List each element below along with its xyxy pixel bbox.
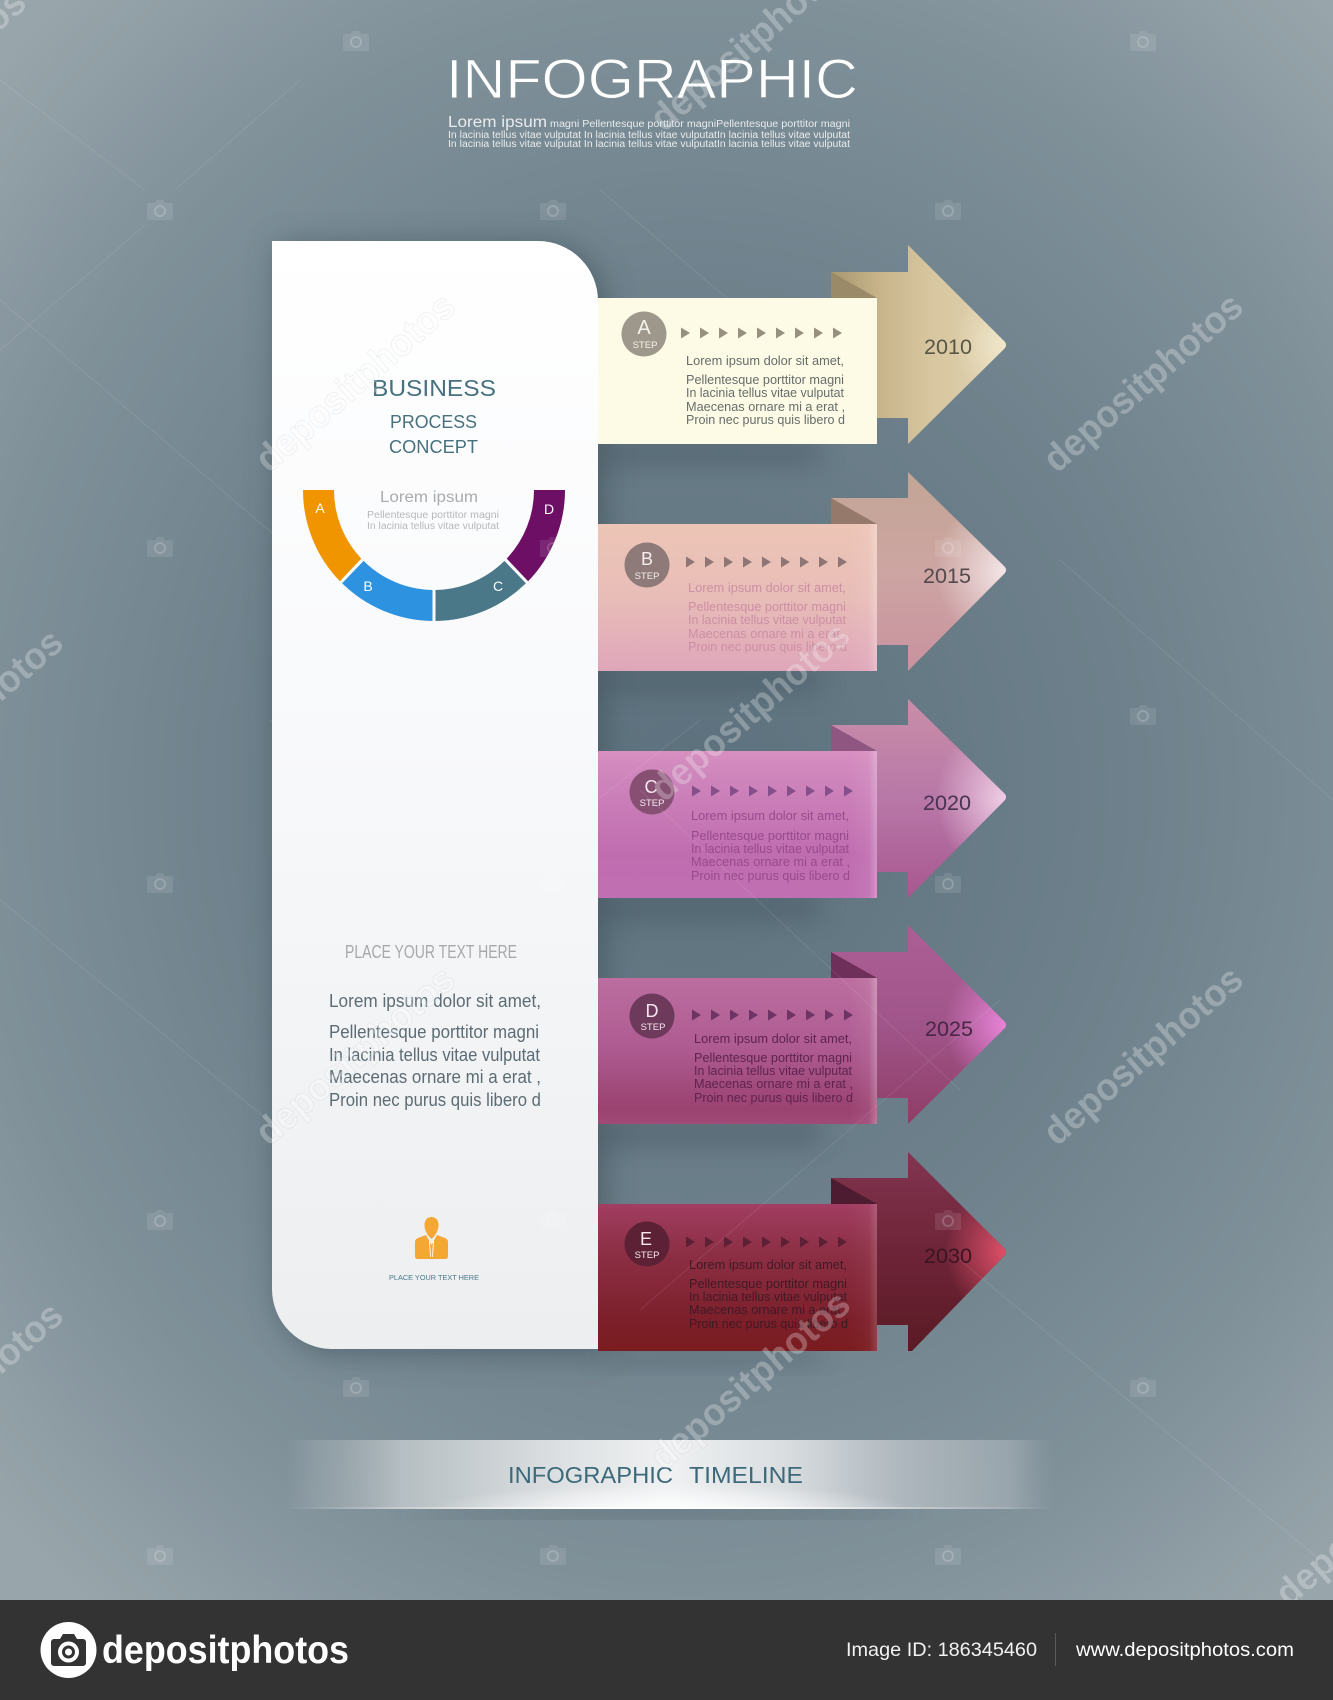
ribbon A (598, 298, 877, 444)
arrow fold A (831, 272, 877, 298)
triangles E (686, 1236, 847, 1248)
text E: Maecenas ornare mi a erat , (689, 1302, 848, 1317)
step badge A: STEP (633, 340, 657, 351)
text B: Pellentesque porttitor magni (688, 599, 846, 614)
step A: 2010 arrow row (598, 245, 1006, 444)
text C: Lorem ipsum dolor sit amet, (691, 808, 849, 823)
ribbon D (598, 978, 877, 1124)
step B: 2015 arrow row (598, 472, 1006, 671)
panel body text: Lorem ipsum dolor sit amet, (329, 991, 541, 1011)
text C: Maecenas ornare mi a erat , (691, 854, 850, 869)
text E: In lacinia tellus vitae vulputat (689, 1289, 847, 1304)
step badge C: STEP (640, 798, 664, 809)
text A (686, 353, 845, 427)
arrow E (831, 1152, 1006, 1351)
website: www.depositphotos.com (1075, 1639, 1294, 1661)
text C: Proin nec purus quis libero d (691, 868, 850, 883)
subtitle text block (448, 114, 850, 150)
ribbon C (598, 751, 877, 898)
chart letters: D (544, 501, 554, 517)
footer bar (0, 1600, 1333, 1700)
chart: semicircle donut (303, 490, 565, 621)
text B: Proin nec purus quis libero d (688, 639, 847, 654)
band label (508, 1462, 803, 1488)
image id: Image ID: 186345460 (846, 1639, 1037, 1661)
text D: Maecenas ornare mi a erat , (694, 1076, 853, 1091)
text B: Maecenas ornare mi a erat , (688, 626, 847, 641)
panel: main white card (272, 241, 598, 1349)
text A: Pellentesque porttitor magni (686, 372, 844, 387)
step badge B: STEP (635, 571, 659, 582)
arrow B (831, 472, 1006, 671)
step badge B: B (641, 549, 653, 569)
text A: Lorem ipsum dolor sit amet, (686, 353, 844, 368)
watermark pattern: depositphotos (247, 958, 464, 1154)
arrow D (831, 925, 1006, 1124)
arrow C (831, 699, 1006, 898)
text E: Pellentesque porttitor magni (689, 1276, 847, 1291)
step badge B (624, 542, 670, 588)
step badge C: C (644, 777, 658, 797)
chart letters: C (493, 578, 503, 594)
logo wordmark: depositphotos (102, 1629, 349, 1672)
ribbon shadows (600, 444, 820, 1361)
ribbon B (598, 524, 877, 671)
text D: Pellentesque porttitor magni (694, 1050, 852, 1065)
text D: Proin nec purus quis libero d (694, 1090, 853, 1105)
step badge E: STEP (635, 1250, 659, 1261)
band label: TIMELINE (689, 1462, 803, 1488)
icon: businessman (415, 1217, 448, 1259)
text E: Lorem ipsum dolor sit amet, (689, 1257, 847, 1272)
panel heading: CONCEPT (389, 437, 478, 457)
step badge E (624, 1222, 670, 1266)
watermark pattern: depositphotos (642, 1283, 859, 1479)
chart centre text (367, 489, 499, 532)
panel body text (329, 991, 541, 1110)
subtitle text block: magni Pellentesque porttitor magniPellentesque porttitor magni (550, 119, 850, 130)
step badge D: D (646, 1001, 658, 1021)
step badge E: E (640, 1229, 652, 1249)
text D: In lacinia tellus vitae vulputat (694, 1063, 852, 1078)
text D (694, 1031, 853, 1105)
step badge D: STEP (641, 1022, 665, 1033)
panel shadow (278, 245, 604, 1353)
triangles C (692, 786, 853, 796)
separator (1055, 1633, 1056, 1666)
watermark pattern: depositphotos (642, 614, 859, 810)
segment C (436, 561, 526, 621)
arrow A (831, 245, 1006, 444)
arrow fold D (831, 952, 877, 978)
year 2025: 2025 (925, 1018, 973, 1041)
ribbon E (598, 1204, 877, 1351)
title: INFOGRAPHIC (446, 47, 858, 110)
chart letters: A (315, 500, 325, 516)
arrow fold B (831, 498, 877, 524)
text A: In lacinia tellus vitae vulputat (686, 385, 844, 400)
step badge A: A (637, 317, 651, 339)
text B (688, 580, 847, 654)
text C: Pellentesque porttitor magni (691, 828, 849, 843)
segment B (342, 561, 432, 621)
triangles A (681, 328, 842, 338)
chart centre text: Pellentesque porttitor magni (367, 509, 499, 521)
panel body text: Pellentesque porttitor magni (329, 1022, 539, 1042)
text D: Lorem ipsum dolor sit amet, (694, 1031, 852, 1046)
text A: Proin nec purus quis libero d (686, 412, 845, 427)
year 2010: 2010 (924, 336, 972, 359)
step E: 2030 arrow row (598, 1152, 1006, 1351)
text E (689, 1257, 848, 1331)
band shadow (410, 1505, 910, 1519)
watermark pattern: depositphotos (247, 285, 464, 481)
watermark pattern: depositphotos (1035, 285, 1252, 481)
step badge D (630, 994, 674, 1038)
chart letters: B (363, 578, 373, 594)
panel body text: In lacinia tellus vitae vulputat (329, 1045, 540, 1065)
text B: Lorem ipsum dolor sit amet, (688, 580, 846, 595)
panel heading: BUSINESS (372, 375, 496, 401)
triangles B (686, 556, 847, 568)
subtitle text block: In lacinia tellus vitae vulputat In lacinia tellus vitae vulputatIn lacinia tellus vitae vulputat (448, 130, 850, 141)
year 2020: 2020 (923, 792, 971, 815)
triangles D (692, 1010, 853, 1020)
icon caption: PLACE YOUR TEXT HERE (389, 1273, 479, 1282)
text C: In lacinia tellus vitae vulputat (691, 841, 849, 856)
panel sub-heading: PLACE YOUR TEXT HERE (345, 942, 517, 962)
step badge C (630, 770, 674, 814)
chart centre text: Lorem ipsum (380, 489, 478, 506)
watermark pattern: depositphotos (1035, 958, 1252, 1154)
bottom timeline band (285, 1440, 1055, 1509)
subtitle text block: Lorem ipsum (448, 114, 547, 131)
year 2015: 2015 (923, 565, 971, 588)
text A: Maecenas ornare mi a erat , (686, 399, 845, 414)
panel body text: Maecenas ornare mi a erat , (329, 1067, 541, 1087)
chart centre text: In lacinia tellus vitae vulputat (367, 520, 499, 532)
logo icon (40, 1622, 96, 1678)
band label: INFOGRAPHIC (508, 1462, 673, 1488)
text E: Proin nec purus quis libero d (689, 1316, 848, 1331)
subtitle text block: In lacinia tellus vitae vulputat In lacinia tellus vitae vulputatIn lacinia tellus vitae vulputat (448, 139, 850, 150)
arrow fold C (831, 725, 877, 751)
text C (691, 808, 850, 883)
text B: In lacinia tellus vitae vulputat (688, 612, 846, 627)
panel heading: PROCESS (390, 412, 477, 432)
arrow fold E (831, 1178, 877, 1204)
step D: 2025 arrow row (598, 925, 1006, 1124)
panel body text: Proin nec purus quis libero d (329, 1090, 541, 1110)
segment D (507, 490, 565, 581)
step C: 2020 arrow row (598, 699, 1006, 898)
chart letters (315, 500, 554, 594)
step badge A (622, 312, 666, 356)
panel heading (372, 375, 496, 457)
segment A (303, 490, 361, 581)
year 2030: 2030 (924, 1245, 972, 1268)
